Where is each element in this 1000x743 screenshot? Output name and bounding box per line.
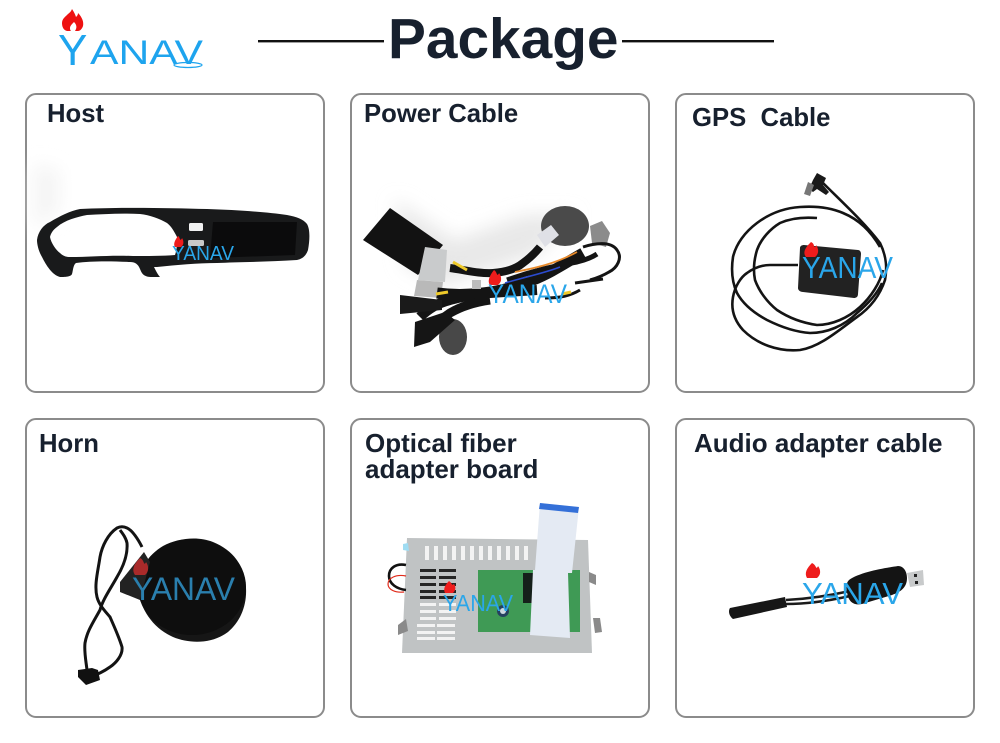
heading line 2: adapter board xyxy=(365,454,538,484)
logo wordmark remainder: ANAV xyxy=(90,34,203,72)
panel: GPS Cable xyxy=(676,94,974,392)
heading: Optical fiber adapter board: Optical fiber xyxy=(365,428,517,458)
panel: Audio adapter cable xyxy=(676,419,974,717)
panel: Power Cable xyxy=(351,94,649,392)
watermark: YANAV xyxy=(443,590,514,616)
logo: YANAV xyxy=(58,9,203,75)
heading: Audio adapter cable: Audio adapter cable xyxy=(694,428,942,458)
panel: Horn xyxy=(26,419,324,717)
panel: Optical fiber adapter board xyxy=(351,419,649,717)
watermark: YANAV xyxy=(802,250,893,285)
panel: Host xyxy=(26,94,324,392)
watermark: YANAV xyxy=(488,279,567,309)
image: power cable harness xyxy=(363,200,619,355)
heading: Horn: Horn xyxy=(39,430,99,458)
icon: logo flame xyxy=(62,9,83,31)
title: Package: Package xyxy=(388,8,619,71)
watermark: YANAV xyxy=(172,243,235,265)
image: audio adapter cable xyxy=(729,566,924,619)
watermark: YANAV xyxy=(132,571,236,607)
heading: Host: Host xyxy=(47,100,105,128)
image: horn speaker xyxy=(78,527,246,685)
watermark: YANAV xyxy=(802,576,903,611)
heading: GPS Cable: GPS Cable xyxy=(692,104,830,132)
logo wordmark: Y xyxy=(58,26,87,75)
image: host dashboard bezel xyxy=(34,165,309,277)
heading: Power Cable: Power Cable xyxy=(364,100,518,128)
image: adapter board xyxy=(388,503,602,653)
image: GPS antenna xyxy=(732,173,886,350)
